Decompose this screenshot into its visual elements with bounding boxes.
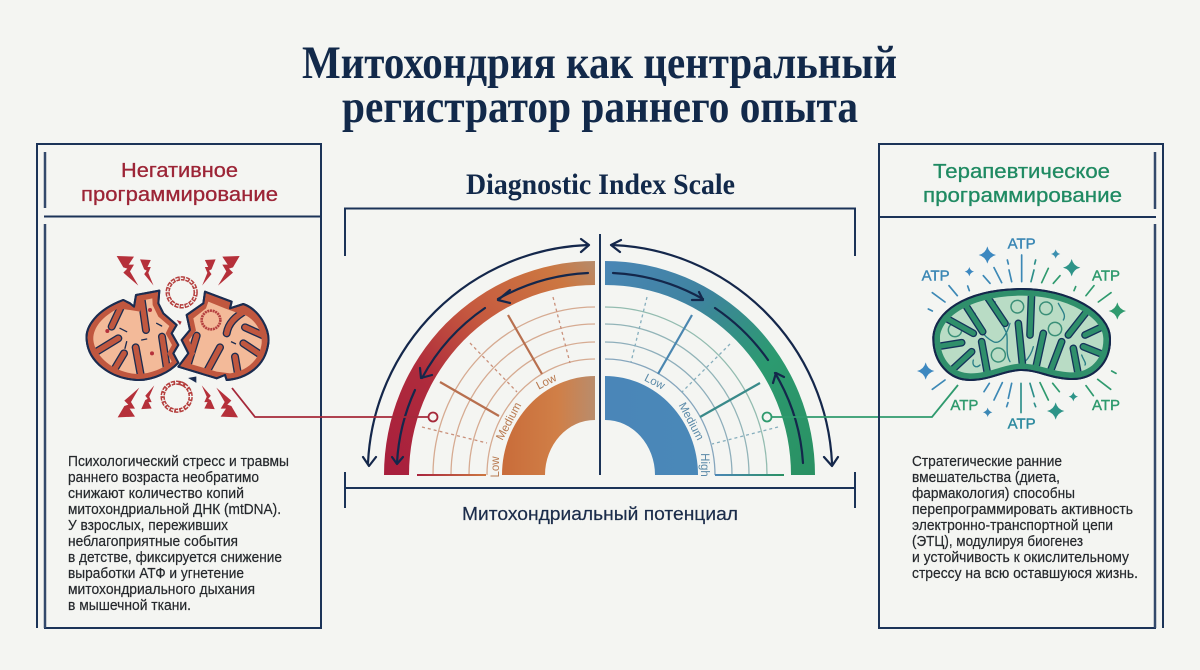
gauge right half: High: [698, 453, 710, 477]
panel frame right: [879, 144, 1163, 628]
gauge left half: Low: [490, 456, 502, 478]
ATP labels: ATP: [1008, 415, 1036, 432]
DNA ring top: [168, 278, 196, 306]
ATP labels: ATP: [1092, 268, 1120, 285]
heading: negative programming: программирование: [81, 183, 278, 206]
connector: red line: [232, 388, 438, 422]
gauge left half: [384, 261, 595, 478]
right fragment: [178, 292, 269, 382]
text block: therapeutic programming: электронно-транспортной цепи: [912, 517, 1113, 534]
text block: therapeutic programming: фармакология) способны: [912, 485, 1075, 502]
text block: therapeutic programming: перепрограммировать активность: [912, 501, 1133, 518]
icon: damaged mitochondrion with lightning: [87, 256, 269, 417]
DNA ring bottom broken: [158, 378, 196, 416]
chart: semicircular gauge: [363, 234, 838, 478]
text block: negative programming: Психологический стресс и травмы: [68, 453, 289, 470]
text block: negative programming: снижают количество копий: [68, 485, 244, 502]
bottom bracket: [345, 472, 855, 508]
ATP labels: ATP: [950, 397, 978, 414]
text block: negative programming: неблагоприятные события: [68, 533, 238, 550]
title: регистратор раннего опыта: [342, 81, 858, 133]
panel: negative programming: [37, 144, 321, 628]
heading: therapeutic programming: Терапевтическое: [933, 160, 1110, 183]
ATP labels: ATP: [1008, 235, 1036, 252]
text block: therapeutic programming: и устойчивость к окислительному: [912, 549, 1129, 566]
lightning bolts: [117, 256, 240, 417]
gauge left half: Low: [535, 372, 559, 392]
ATP labels: [922, 235, 1120, 432]
text block: negative programming: [68, 453, 289, 614]
gauge right half: [605, 261, 815, 477]
ATP labels: ATP: [922, 268, 950, 285]
text block: negative programming: митохондриального дыхания: [68, 581, 255, 598]
gauge left half: Medium: [494, 401, 524, 442]
text block: negative programming: раннего возраста необратимо: [68, 469, 259, 486]
heading: negative programming: Негативное: [121, 159, 238, 182]
heading: therapeutic programming: [923, 160, 1122, 207]
heading: diagnostic index scale: Diagnostic Index Scale: [466, 168, 735, 201]
text block: therapeutic programming: Стратегические ранние: [912, 453, 1062, 470]
heading: negative programming: [81, 159, 278, 206]
connector: green line: [762, 385, 958, 422]
label: mitochondrial potential: Митохондриальный потенциал: [462, 504, 738, 524]
text block: negative programming: выработки АТФ и угнетение: [68, 565, 244, 582]
center divider: [599, 234, 601, 475]
text block: negative programming: У взрослых, переживших: [68, 517, 228, 534]
text block: therapeutic programming: стрессу на всю оставшуюся жизнь.: [912, 565, 1138, 582]
panel frame left: [37, 144, 321, 628]
top bracket: [345, 208, 855, 256]
gauge right half: Low: [642, 372, 667, 393]
text block: negative programming: в мышечной ткани.: [68, 597, 191, 614]
panel: therapeutic programming: [879, 144, 1163, 628]
ATP labels: ATP: [1092, 397, 1120, 414]
heading: therapeutic programming: программирование: [923, 184, 1122, 207]
mitochondrion body: [933, 289, 1110, 380]
text block: therapeutic programming: вмешательства (диета,: [912, 469, 1060, 486]
text block: therapeutic programming: (ЭТЦ), модулируя биогенез: [912, 533, 1083, 550]
text block: therapeutic programming: [912, 453, 1138, 582]
gauge right half: Medium: [676, 401, 706, 442]
text block: negative programming: митохондриальной ДНК (mtDNA).: [68, 501, 281, 518]
text block: negative programming: в детстве, фиксируется снижение: [68, 549, 282, 566]
sparkles: [917, 246, 1126, 420]
title: [302, 37, 897, 133]
left fragment: [87, 291, 182, 380]
arrows: circulation around gauge: [363, 239, 838, 466]
energy rays: [928, 255, 1116, 413]
icon: healthy mitochondrion with ATP: [917, 235, 1126, 432]
title: Митохондрия как центральный: [302, 37, 897, 89]
